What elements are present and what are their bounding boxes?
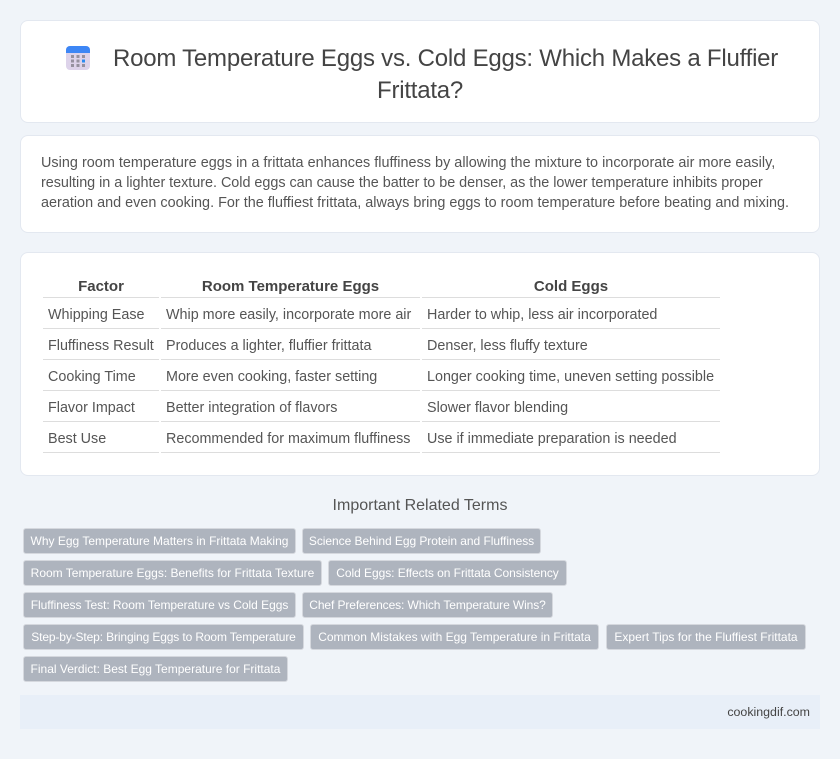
tag: [310, 624, 599, 650]
tag: Fluffiness Test: Room Temperature vs Cold Eggs: [31, 598, 288, 612]
row: Fluffiness Result: Fluffiness Result: [48, 338, 154, 354]
row: Fluffiness Result: [48, 338, 588, 354]
panel: introduction: [20, 135, 820, 233]
row: Whipping Ease: Whip more easily, incorporate more air: [166, 307, 411, 323]
panel: title header: [20, 20, 820, 123]
row: Whipping Ease: Harder to whip, less air incorporated: [427, 307, 657, 323]
intro paragraph: Using room temperature eggs in a frittata enhances fluffiness by allowing the mixture to incorporate air more easily,: [41, 155, 775, 171]
row: Best Use: Best Use: [48, 431, 106, 447]
tag: [302, 528, 541, 554]
row: Cooking Time: More even cooking, faster setting: [166, 369, 377, 385]
row: Flavor Impact: [48, 400, 568, 416]
header: Room Temperature Eggs: Room Temperature Eggs: [202, 278, 379, 295]
intro paragraph: aeration and even cooking. For the fluffiest frittata, always bring eggs to room temperature before beating and mixing.: [41, 195, 789, 211]
tag: [23, 656, 288, 682]
icon: calendar: [66, 46, 90, 70]
tag: Expert Tips for the Fluffiest Frittata: [614, 630, 798, 644]
row: Fluffiness Result: Denser, less fluffy texture: [427, 338, 588, 354]
tag: [328, 560, 567, 586]
title: Room Temperature Eggs vs. Cold Eggs: Which Makes a Fluffier: [113, 45, 778, 72]
row: Flavor Impact: Better integration of flavors: [166, 400, 337, 416]
related term tags: [23, 528, 806, 682]
row: Best Use: Use if immediate preparation is needed: [427, 431, 677, 447]
tag: [23, 528, 296, 554]
tag: [23, 560, 322, 586]
tag: [302, 592, 553, 618]
row: Fluffiness Result: Produces a lighter, fluffier frittata: [166, 338, 371, 354]
panel: comparison table: [20, 252, 820, 476]
tag: Common Mistakes with Egg Temperature in Frittata: [318, 630, 591, 644]
row: Whipping Ease: Whipping Ease: [48, 307, 144, 323]
row: Whipping Ease: [48, 307, 657, 323]
title: [113, 45, 778, 104]
intro paragraph: [41, 155, 789, 211]
tag: Science Behind Egg Protein and Fluffiness: [309, 534, 534, 548]
footer site name: cookingdif.com: [727, 705, 810, 719]
tag: Final Verdict: Best Egg Temperature for Frittata: [31, 662, 280, 676]
header: Cold Eggs: Cold Eggs: [534, 278, 608, 295]
row: Cooking Time: Cooking Time: [48, 369, 136, 385]
tag: Why Egg Temperature Matters in Frittata Making: [31, 534, 288, 548]
tag: [606, 624, 806, 650]
tag: [23, 624, 304, 650]
row: Flavor Impact: Flavor Impact: [48, 400, 135, 416]
intro paragraph: resulting in a lighter texture. Cold eggs can cause the batter to be denser, as the lower temperature inhibits proper: [41, 175, 763, 191]
tag: Step-by-Step: Bringing Eggs to Room Temperature: [31, 630, 296, 644]
tag: Room Temperature Eggs: Benefits for Frittata Texture: [31, 566, 314, 580]
tag: Cold Eggs: Effects on Frittata Consistency: [336, 566, 559, 580]
tag: Chef Preferences: Which Temperature Wins?: [309, 598, 546, 612]
title: Frittata?: [377, 77, 463, 104]
header: Factor: Factor: [78, 278, 124, 295]
tag: [23, 592, 296, 618]
row: Flavor Impact: Slower flavor blending: [427, 400, 568, 416]
row: Best Use: [48, 431, 677, 447]
row: Cooking Time: Longer cooking time, uneven setting possible: [427, 369, 714, 385]
footer: [20, 695, 820, 729]
row: Cooking Time: [48, 369, 714, 385]
row: Best Use: Recommended for maximum fluffiness: [166, 431, 410, 447]
heading: Important Related Terms: Important Related Terms: [333, 497, 507, 514]
